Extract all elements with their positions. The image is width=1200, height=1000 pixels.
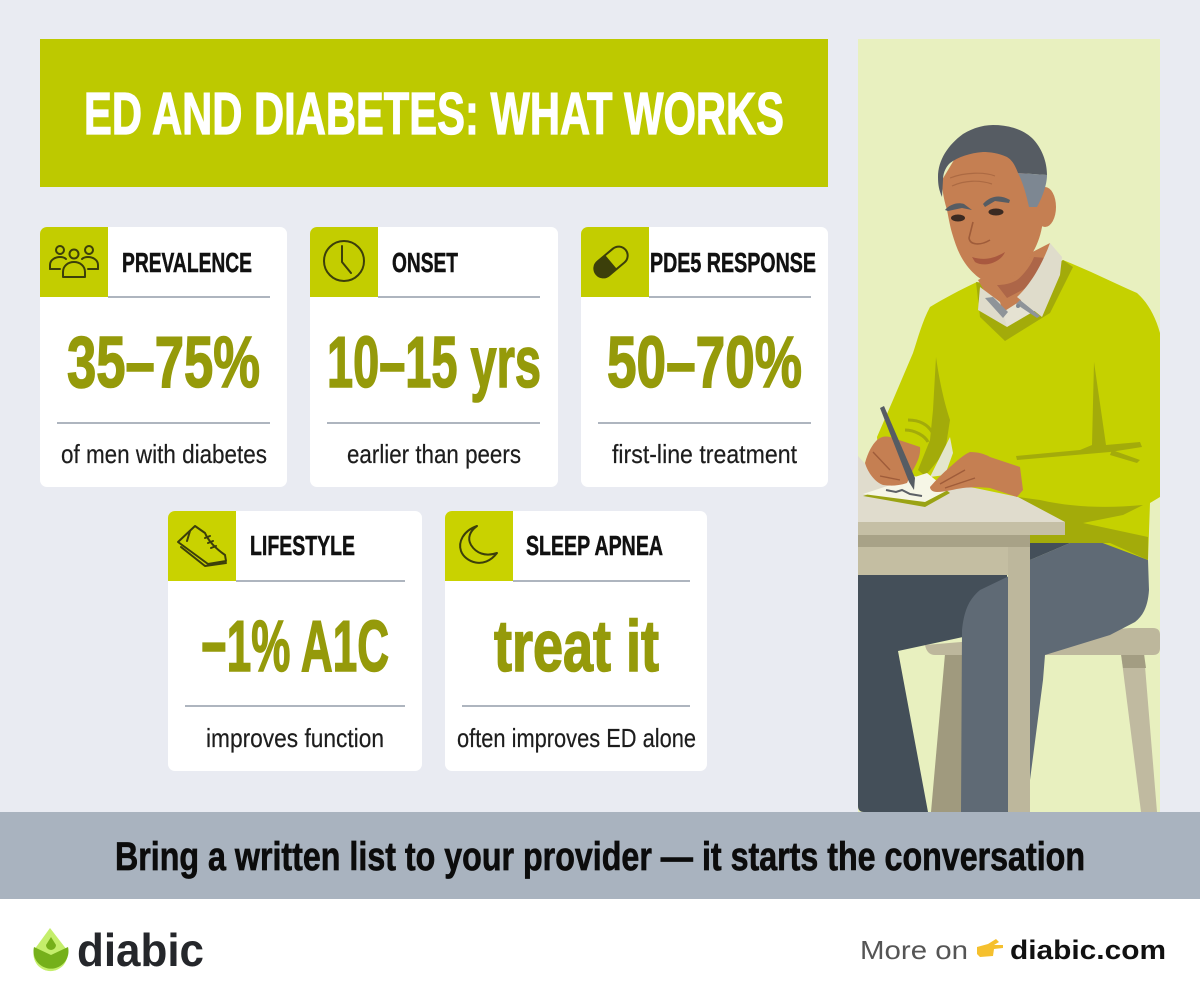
website link: diabic.com <box>1010 935 1166 965</box>
panel: PDE5 response: PDE5 RESPONSE <box>650 247 816 278</box>
logo: diabic: diabic <box>77 924 204 976</box>
illustration: man writing at a table <box>858 39 1160 812</box>
shirt collar <box>978 243 1062 327</box>
icon: moon <box>460 526 497 563</box>
panel: prevalence <box>40 227 287 487</box>
footer <box>0 899 1200 1000</box>
panel: sleep apnea: SLEEP APNEA <box>526 530 663 561</box>
panel: prevalence: PREVALENCE <box>122 247 252 278</box>
panel: onset <box>310 227 558 487</box>
head <box>938 125 1056 283</box>
title banner: ED AND DIABETES: WHAT WORKS <box>84 81 784 147</box>
panel: prevalence: 35–75% <box>67 323 260 403</box>
panel: sleep apnea <box>445 511 707 771</box>
panel: PDE5 response <box>581 227 828 487</box>
notepad <box>863 473 950 507</box>
stool <box>925 628 1160 812</box>
website link <box>860 935 1166 965</box>
panel: onset: ONSET <box>392 247 458 278</box>
icon: shoe <box>178 526 226 566</box>
panel: lifestyle: improves function <box>206 723 384 753</box>
face features <box>945 173 1010 264</box>
panel: lifestyle: −1% A1C <box>201 607 389 687</box>
icon: pointing hand <box>977 939 1003 957</box>
hands <box>865 436 1023 497</box>
neck <box>978 243 1050 315</box>
pen <box>880 406 915 490</box>
call-to-action band <box>0 812 1200 899</box>
panel: sleep apnea: treat it <box>494 607 659 687</box>
icon: pill <box>591 243 631 281</box>
front leg <box>961 543 1149 812</box>
panel: sleep apnea: often improves ED alone <box>457 723 696 753</box>
icon: clock <box>324 241 364 281</box>
panel: PDE5 response: 50–70% <box>607 323 802 403</box>
panel: lifestyle: LIFESTYLE <box>250 530 355 561</box>
panel: prevalence: of men with diabetes <box>61 439 267 469</box>
sweater neckline <box>976 260 1073 341</box>
title banner <box>40 39 828 187</box>
panel: onset: earlier than peers <box>347 439 521 469</box>
back leg <box>858 575 1007 812</box>
panel: PDE5 response: first-line treatment <box>612 439 798 469</box>
table <box>858 456 1065 812</box>
panel: lifestyle <box>168 511 422 771</box>
panel: onset: 10–15 yrs <box>327 323 541 403</box>
icon: people <box>50 246 98 277</box>
website link: More on <box>860 935 968 965</box>
sweater <box>877 260 1160 560</box>
